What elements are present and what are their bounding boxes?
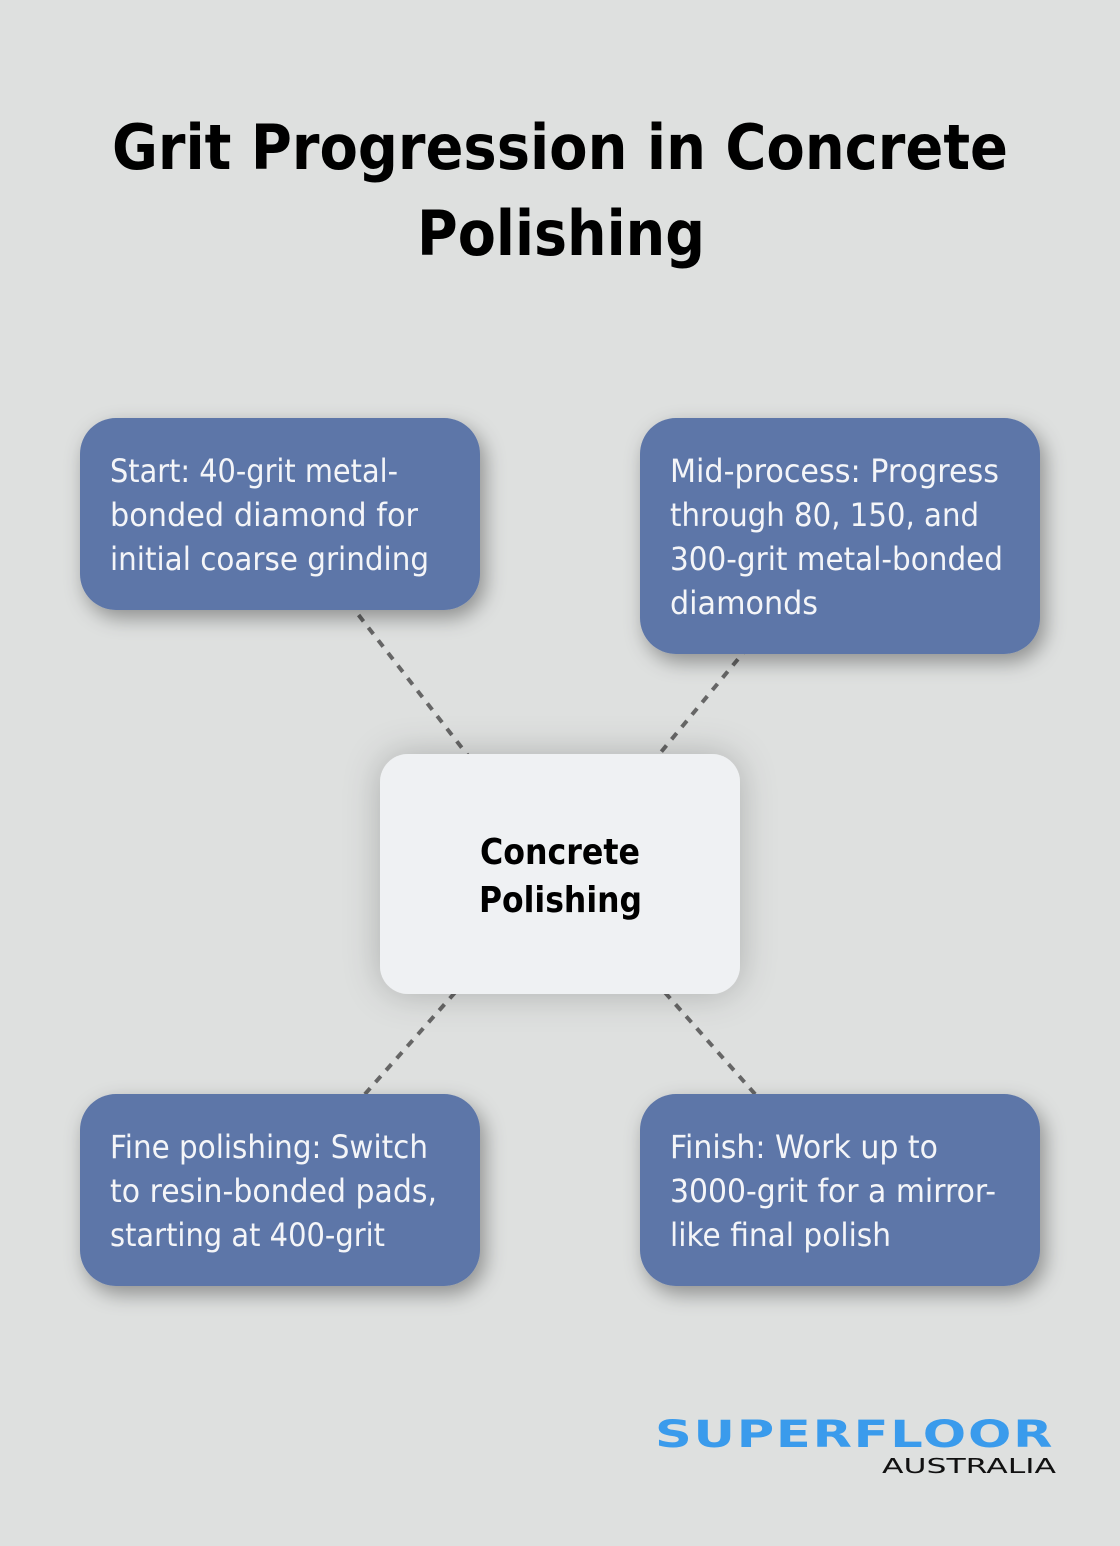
panel: mid-process: through 80, 150, and xyxy=(670,496,979,534)
panel: start: initial coarse grinding xyxy=(110,540,429,578)
panel: fine polishing: to resin-bonded pads, xyxy=(110,1172,437,1210)
panel: start: bonded diamond for xyxy=(110,496,419,534)
connector lines xyxy=(280,514,840,1190)
panel: mid-process xyxy=(640,418,1040,654)
panel: mid-process: Mid-process: Progress xyxy=(670,452,999,490)
panel: start xyxy=(80,418,480,610)
panel: concrete polishing centre: Concrete xyxy=(480,832,640,873)
panel: concrete polishing centre xyxy=(380,754,740,994)
title xyxy=(112,111,1008,270)
panel: finish: like final polish xyxy=(670,1216,891,1254)
title: Grit Progression in Concrete xyxy=(112,111,1008,184)
panel: finish: 3000-grit for a mirror- xyxy=(670,1172,996,1210)
title: Polishing xyxy=(417,197,705,270)
panel: mid-process: diamonds xyxy=(670,584,818,622)
logo: Superfloor Australia: SUPERFLOOR xyxy=(655,1413,1052,1456)
panel: mid-process: 300-grit metal-bonded xyxy=(670,540,1003,578)
panel: concrete polishing centre: Polishing xyxy=(479,880,642,921)
panel: start: Start: 40-grit metal- xyxy=(110,452,398,490)
panel: fine polishing: starting at 400-grit xyxy=(110,1216,385,1254)
logo: Superfloor Australia: AUSTRALIA xyxy=(882,1454,1056,1478)
logo: Superfloor Australia xyxy=(655,1413,1056,1478)
panel: finish: Finish: Work up to xyxy=(670,1128,938,1166)
panel: fine polishing: Fine polishing: Switch xyxy=(110,1128,428,1166)
panel: finish xyxy=(640,1094,1040,1286)
panel: fine polishing xyxy=(80,1094,480,1286)
